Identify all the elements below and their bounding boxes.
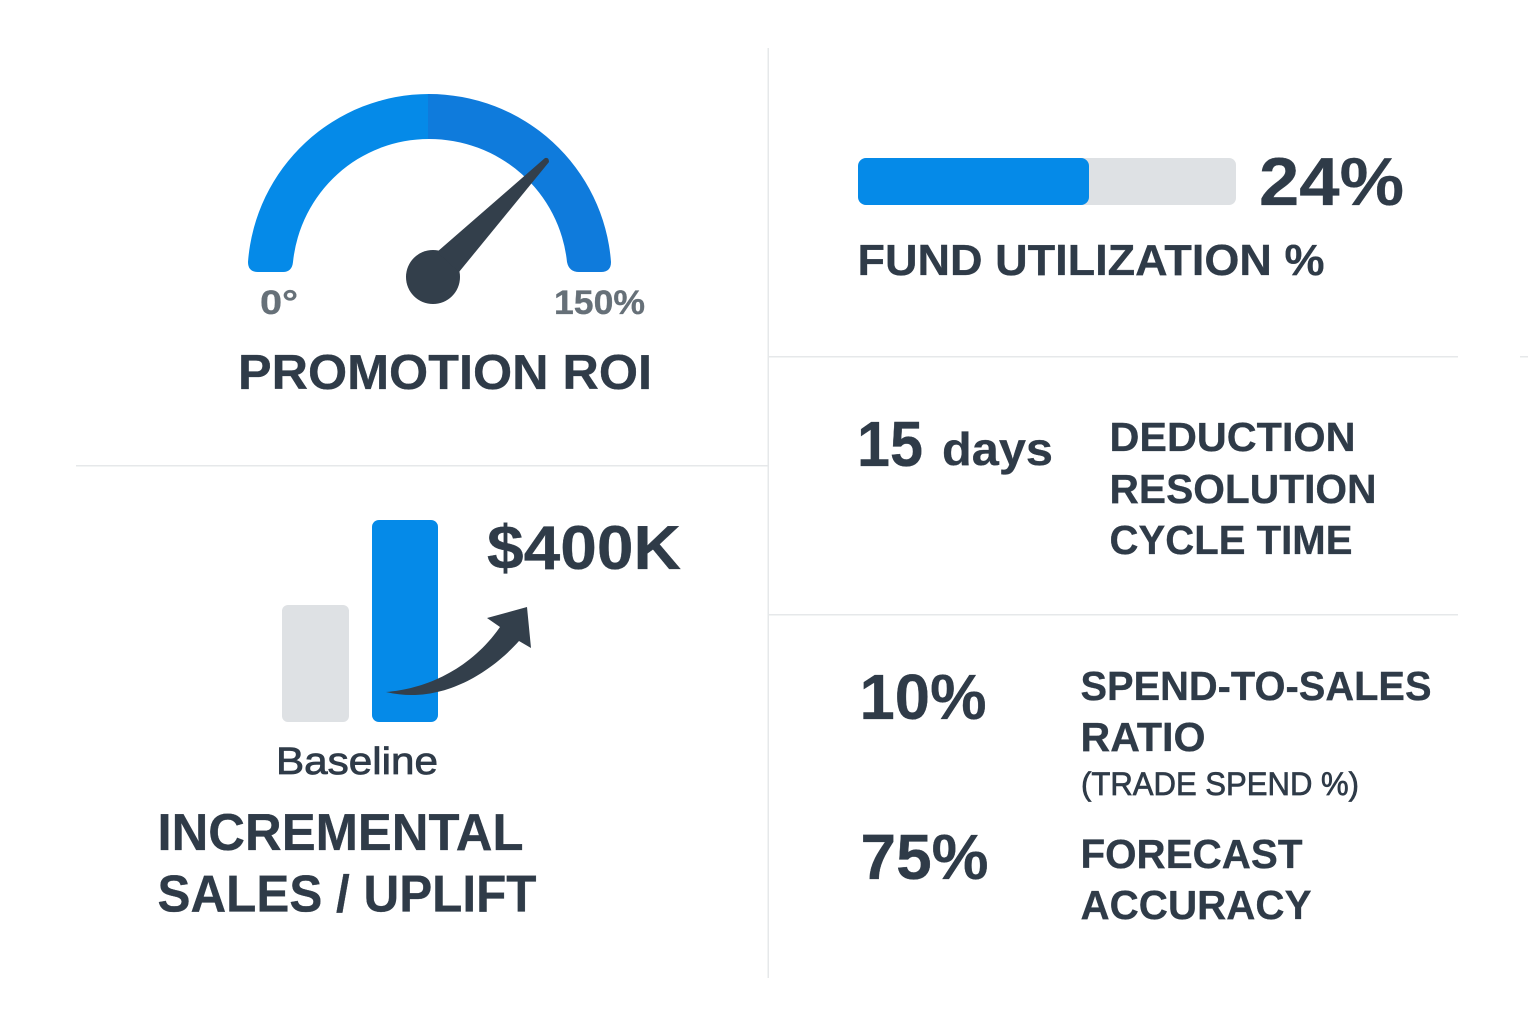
value: 15 days: days [942,423,1053,475]
heading: spend-to-sales ratio: SPEND-TO-SALES [1080,663,1432,709]
subheading: trade spend: (TRADE SPEND %) [1081,766,1359,802]
arrow: uplift trend [386,607,531,695]
heading: incremental sales: SALES / UPLIFT [158,866,537,924]
heading: deduction resolution cycle time: DEDUCTION [1110,414,1356,460]
progress fill [858,158,1089,205]
value: 15 days: 15 [857,408,923,480]
gauge minimum label: 0° [260,284,298,322]
panel: deduction resolution [857,408,1376,563]
heading: deduction resolution cycle time [1110,414,1376,563]
gauge needle [406,158,549,304]
progress track [1070,158,1236,205]
heading: forecast accuracy: ACCURACY [1080,882,1312,928]
label: baseline: Baseline [276,741,438,783]
heading: incremental sales [158,804,537,924]
gauge maximum label: 150% [554,284,645,322]
heading: promotion ROI: PROMOTION ROI [238,346,652,400]
panel: spend-to-sales ratio [860,661,1432,802]
heading: spend-to-sales ratio: RATIO [1080,714,1206,760]
heading: incremental sales: INCREMENTAL [158,804,524,862]
value: 15 days [857,408,1053,480]
heading: spend-to-sales ratio [1080,663,1432,760]
value: 75%: 75% [860,821,988,893]
value: 24%: 24% [1259,144,1404,220]
value: 10%: 10% [860,661,986,733]
heading: fund utilization: FUND UTILIZATION % [858,236,1324,285]
panel: incremental sales [158,514,681,924]
bar: uplift [372,520,438,722]
gauge arc [248,94,611,272]
panel: fund utilization [858,144,1404,285]
heading: forecast accuracy: FORECAST [1080,831,1302,877]
value: $400K: $400K [487,514,681,583]
panel: promotion ROI [238,94,652,400]
panel: forecast accuracy [860,821,1312,928]
heading: deduction resolution cycle time: RESOLUTION [1110,466,1376,512]
heading: deduction resolution cycle time: CYCLE TIME [1110,517,1352,563]
heading: forecast accuracy [1080,831,1312,928]
bar: baseline [282,605,349,722]
